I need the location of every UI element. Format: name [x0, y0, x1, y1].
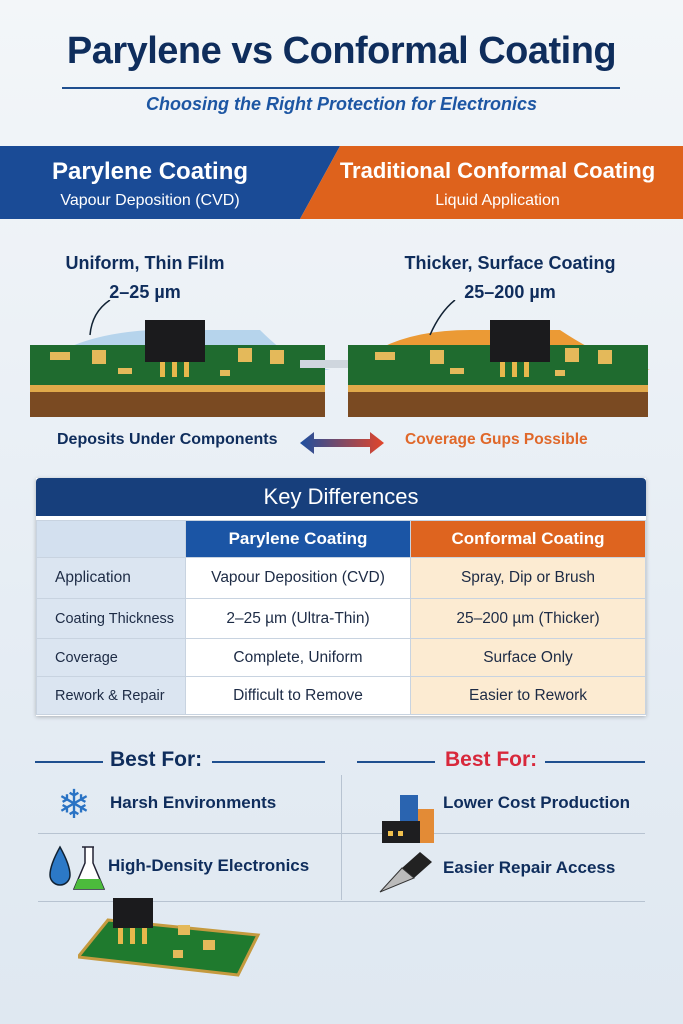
- table: key differences: Rework & Repair: [55, 688, 165, 704]
- banner: [0, 146, 683, 219]
- banner left text: Vapour Deposition (CVD): [60, 192, 240, 209]
- illustration: chip board: [78, 898, 260, 977]
- icon: soldering iron: [380, 852, 432, 892]
- icon: snowflake: ❄: [57, 783, 91, 827]
- pcb illustrations: [30, 300, 650, 417]
- label left: [66, 253, 224, 302]
- item: harsh: Harsh Environments: [110, 793, 276, 812]
- caption left: Deposits Under Components: [57, 431, 277, 448]
- table: key differences: Parylene Coating: [229, 529, 367, 548]
- caption right: Coverage Gups Possible: [405, 431, 588, 448]
- banner right text: Liquid Application: [435, 192, 560, 209]
- table heading: Key Differences: [264, 484, 418, 509]
- icon: drop and flask: [49, 846, 106, 890]
- table: key differences: Coverage: [55, 650, 118, 666]
- table: key differences: Complete, Uniform: [233, 648, 363, 666]
- table: key differences: Vapour Deposition (CVD): [211, 569, 385, 586]
- icon: factory: [382, 795, 434, 843]
- table: key differences: 2–25 µm (Ultra-Thin): [226, 610, 370, 626]
- label right: Thicker, Surface Coating: [404, 253, 616, 273]
- subtitle: Choosing the Right Protection for Electronics: [146, 94, 537, 114]
- best for left heading: Best For:: [110, 748, 202, 771]
- table: key differences: Spray, Dip or Brush: [461, 569, 595, 586]
- table: key differences: Application: [55, 569, 131, 586]
- item: high-density: High-Density Electronics: [108, 856, 309, 875]
- label right: [404, 253, 616, 302]
- table: key differences: Easier to Rework: [469, 686, 587, 704]
- table: key differences: Coating Thickness: [55, 610, 174, 626]
- title: Parylene vs Conformal Coating: [67, 30, 616, 72]
- banner left text: [52, 158, 248, 209]
- table: key differences: Surface Only: [483, 648, 573, 666]
- item: lower cost: Lower Cost Production: [443, 793, 630, 812]
- arrow: double: [300, 432, 384, 454]
- best for right heading: Best For:: [445, 748, 537, 771]
- table: key differences: 25–200 µm (Thicker): [456, 610, 600, 626]
- item: repair: Easier Repair Access: [443, 858, 615, 877]
- banner right text: [340, 158, 655, 209]
- label right: 25–200 µm: [464, 282, 556, 302]
- label left: Uniform, Thin Film: [66, 253, 224, 273]
- table: key differences: Difficult to Remove: [233, 686, 363, 704]
- banner right text: Traditional Conformal Coating: [340, 158, 655, 183]
- table: key differences: Conformal Coating: [452, 529, 604, 548]
- label left: 2–25 µm: [109, 282, 181, 302]
- table heading: [36, 478, 646, 516]
- table: key differences: [36, 478, 646, 716]
- banner left text: Parylene Coating: [52, 158, 248, 185]
